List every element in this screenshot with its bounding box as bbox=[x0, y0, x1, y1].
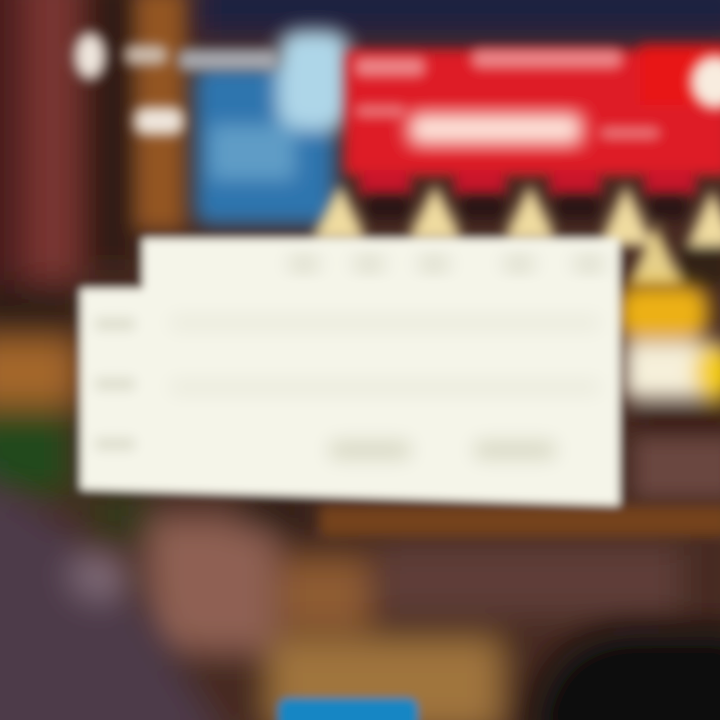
banner headline bbox=[408, 112, 583, 146]
yellow and white side decorations bbox=[618, 285, 720, 498]
table background bbox=[80, 238, 620, 506]
table header row bbox=[290, 255, 603, 273]
blue panel bbox=[195, 30, 350, 225]
wood shelf bbox=[320, 506, 720, 536]
blue object at bottom bbox=[278, 698, 418, 720]
red banner bbox=[345, 45, 720, 195]
awning scallops bbox=[312, 185, 720, 285]
table row labels bbox=[95, 318, 135, 450]
banner corner badge bbox=[691, 56, 720, 108]
banner text blurs bbox=[355, 50, 660, 138]
white menu table panel bbox=[80, 238, 620, 506]
white title text blurs bbox=[75, 33, 278, 134]
foreground person bbox=[0, 470, 235, 720]
wood column bbox=[135, 0, 185, 230]
banner background bbox=[345, 45, 720, 195]
foreground dark shape bbox=[530, 630, 720, 720]
table cell content bbox=[170, 318, 600, 458]
